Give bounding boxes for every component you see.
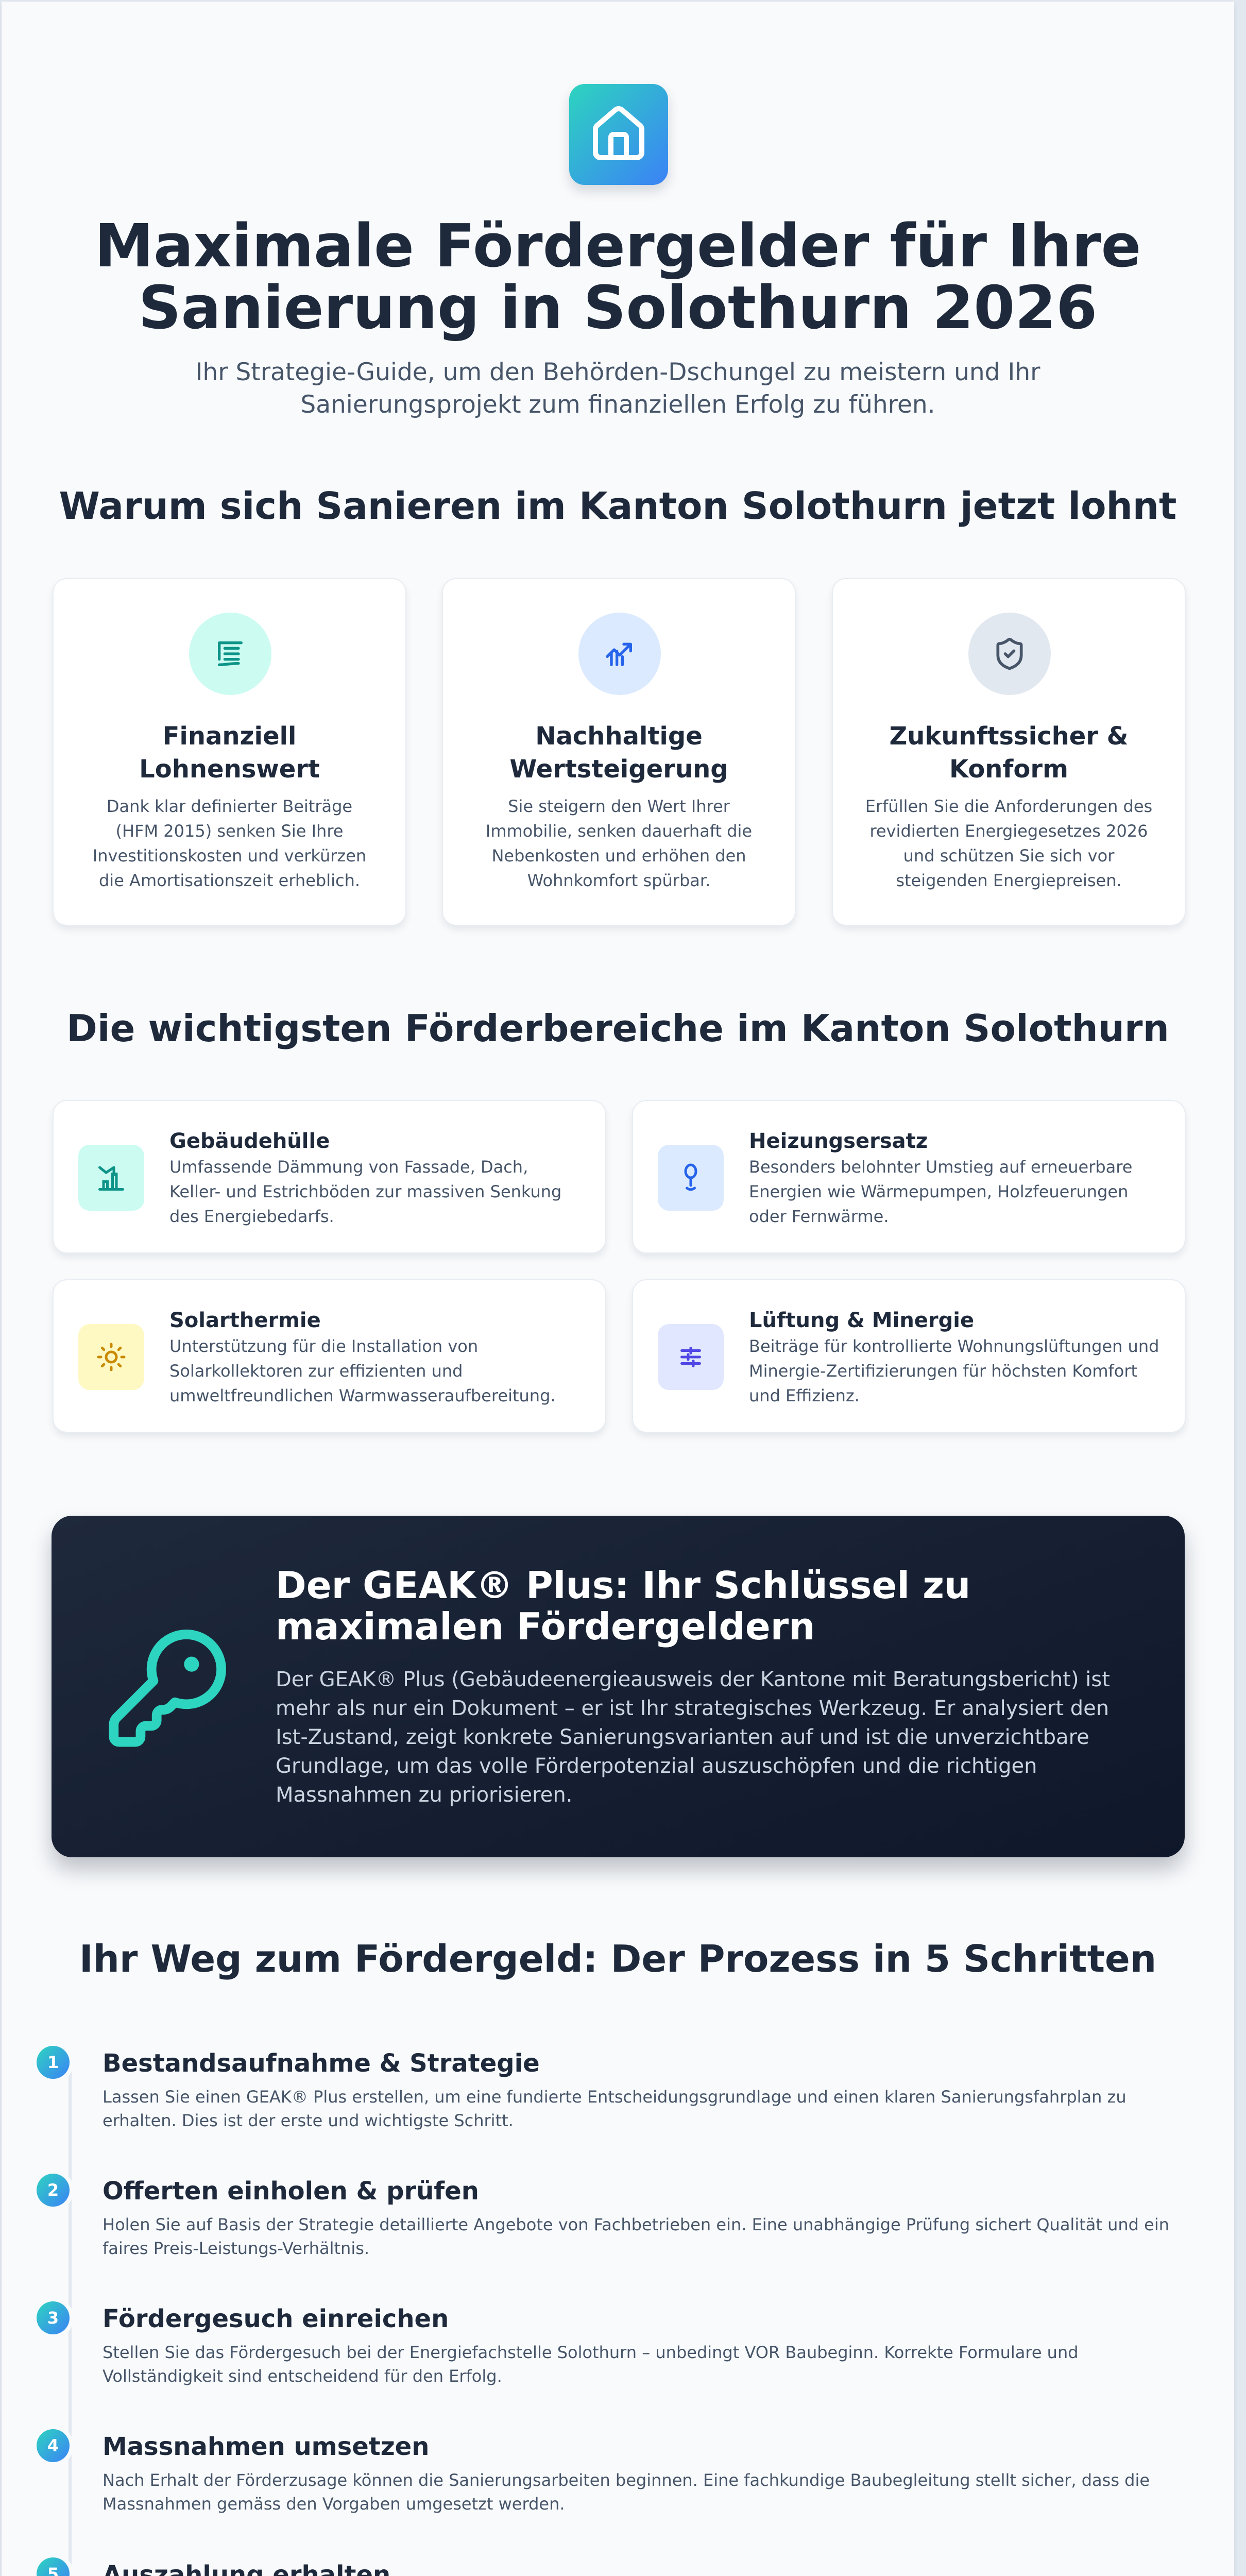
step 1: 1 <box>47 2053 59 2072</box>
panel: Finanziell Lohnenswert <box>53 578 406 926</box>
card text: revidierten Energiegesetzes 2026 <box>869 821 1148 841</box>
GEAK text: Massnahmen zu priorisieren. <box>276 1783 572 1807</box>
subtitle <box>196 358 1040 419</box>
GEAK text <box>276 1668 1110 1807</box>
feature title: Gebäudehülle <box>169 1129 330 1153</box>
card text: Sie steigern den Wert Ihrer <box>508 796 730 816</box>
card text: und schützen Sie sich vor <box>903 846 1114 866</box>
card text: (HFM 2015) senken Sie Ihre <box>116 821 343 841</box>
card text: Nebenkosten und erhöhen den <box>491 846 746 866</box>
feature text: Minergie-Zertifizierungen für höchsten Komfort <box>749 1361 1137 1381</box>
step 2: 2 <box>47 2180 59 2200</box>
panel: Nachhaltige Wertsteigerung <box>442 578 796 926</box>
step 4 <box>37 2429 1150 2514</box>
card text <box>865 796 1152 890</box>
timeline line <box>69 2062 72 2576</box>
step 3: Stellen Sie das Fördergesuch bei der Energiefachstelle Solothurn – unbedingt VOR Baubeginn. Korrekte Formulare und <box>103 2343 1079 2362</box>
panel: Solarthermie <box>53 1279 606 1433</box>
heading: Prozess: Ihr Weg zum Fördergeld: Der Prozess in 5 Schritten <box>79 1937 1156 1980</box>
card title: Finanziell <box>163 722 296 751</box>
step 5 <box>37 2557 390 2576</box>
step 1 <box>37 2046 1126 2130</box>
step 3: Vollständigkeit sind entscheidend für den Erfolg. <box>103 2366 502 2386</box>
step 4: Massnahmen gemäss den Vorgaben umgesetzt werden. <box>103 2494 565 2514</box>
title: Maximale Fördergelder für Ihre <box>95 212 1141 281</box>
feature text <box>749 1157 1132 1226</box>
feature text: umweltfreundlichen Warmwasseraufbereitung. <box>169 1386 556 1405</box>
GEAK text: Der GEAK® Plus (Gebäudeenergieausweis der Kantone mit Beratungsbericht) ist <box>276 1668 1110 1691</box>
step 2: Offerten einholen & prüfen <box>103 2177 479 2206</box>
heading: Warum: Warum sich Sanieren im Kanton Solothurn jetzt lohnt <box>59 484 1176 528</box>
card text <box>486 796 752 890</box>
card title <box>889 722 1129 784</box>
step 1: Lassen Sie einen GEAK® Plus erstellen, um eine fundierte Entscheidungsgrundlage und einen klaren Sanierungsfahrplan zu <box>103 2087 1126 2107</box>
feature text <box>169 1157 561 1226</box>
icon: finance <box>189 613 271 695</box>
panel: Heizungsersatz <box>632 1100 1186 1253</box>
step 3: Fördergesuch einreichen <box>103 2304 449 2333</box>
icon: shield <box>968 613 1051 695</box>
card text: die Amortisationszeit erheblich. <box>99 871 360 890</box>
feature text: Solarkollektoren zur effizienten und <box>169 1361 463 1381</box>
card title: Zukunftssicher & <box>889 722 1129 751</box>
feature text: oder Fernwärme. <box>749 1207 889 1226</box>
panel: GEAK Plus <box>52 1516 1185 1857</box>
icon: sliders <box>658 1324 724 1390</box>
step 4: 4 <box>47 2436 59 2455</box>
card text: Wohnkomfort spürbar. <box>527 871 710 890</box>
GEAK title <box>276 1564 970 1648</box>
icon: house <box>569 84 668 185</box>
step 1: erhalten. Dies ist der erste und wichtigste Schritt. <box>103 2111 514 2130</box>
step 2 <box>37 2174 1169 2258</box>
panel: Zukunftssicher <box>832 578 1186 926</box>
card title <box>139 722 320 784</box>
panel: Gebäudehülle <box>53 1100 606 1253</box>
step 4: Massnahmen umsetzen <box>103 2432 429 2461</box>
card title: Wertsteigerung <box>509 755 728 784</box>
step 1: Bestandsaufnahme & Strategie <box>103 2049 540 2078</box>
card text: Investitionskosten und verkürzen <box>93 846 366 866</box>
card title: Nachhaltige <box>535 722 703 751</box>
subtitle: Sanierungsprojekt zum finanziellen Erfolg zu führen. <box>300 391 935 419</box>
GEAK text: mehr als nur ein Dokument – er ist Ihr strategisches Werkzeug. Er analysiert den <box>276 1697 1109 1720</box>
card title: Lohnenswert <box>139 755 320 784</box>
GEAK text: Ist-Zustand, zeigt konkrete Sanierungsvarianten auf und ist die unverzichtbare <box>276 1725 1089 1749</box>
step 4: Nach Erhalt der Förderzusage können die Sanierungsarbeiten beginnen. Eine fachkundige Baubegleitung stellt sicher, dass die <box>103 2470 1150 2490</box>
step 3 <box>37 2301 1079 2386</box>
feature text: Besonders belohnter Umstieg auf erneuerbare <box>749 1157 1132 1177</box>
card text: Erfüllen Sie die Anforderungen des <box>865 796 1152 816</box>
card title <box>509 722 728 784</box>
icon: sun <box>78 1324 144 1390</box>
subtitle: Ihr Strategie-Guide, um den Behörden-Dschungel zu meistern und Ihr <box>196 358 1040 386</box>
icon: key <box>109 1630 226 1747</box>
step 3: 3 <box>47 2308 59 2328</box>
GEAK title: Der GEAK® Plus: Ihr Schlüssel zu <box>276 1564 970 1607</box>
heading: Förderbereiche: Die wichtigsten Förderbereiche im Kanton Solothurn <box>66 1007 1169 1050</box>
feature text <box>749 1336 1159 1405</box>
feature text: Unterstützung für die Installation von <box>169 1336 478 1356</box>
feature text: und Effizienz. <box>749 1386 860 1405</box>
card text: Dank klar definierter Beiträge <box>107 796 352 816</box>
GEAK text: Grundlage, um das volle Förderpotenzial auszuschöpfen und die richtigen <box>276 1754 1037 1778</box>
feature title: Lüftung & Minergie <box>749 1309 974 1332</box>
card text: Immobilie, senken dauerhaft die <box>486 821 752 841</box>
feature text: Energien wie Wärmepumpen, Holzfeuerungen <box>749 1182 1128 1201</box>
card title: Konform <box>949 755 1068 784</box>
step 2: Holen Sie auf Basis der Strategie detaillierte Angebote von Fachbetrieben ein. Eine unabhängige Prüfung sichert Qualität und ein <box>103 2215 1169 2234</box>
feature title: Heizungsersatz <box>749 1129 928 1153</box>
feature text <box>169 1336 556 1405</box>
title: Sanierung in Solothurn 2026 <box>139 274 1097 343</box>
title <box>95 212 1141 343</box>
card text: steigenden Energiepreisen. <box>896 871 1122 890</box>
feature text: des Energiebedarfs. <box>169 1207 334 1226</box>
icon: heat <box>658 1145 724 1211</box>
card text <box>93 796 366 890</box>
icon: building <box>78 1145 144 1211</box>
step 2: faires Preis-Leistungs-Verhältnis. <box>103 2239 369 2258</box>
feature text: Keller- und Estrichböden zur massiven Senkung <box>169 1182 561 1201</box>
panel: Lüftung <box>632 1279 1186 1433</box>
feature text: Umfassende Dämmung von Fassade, Dach, <box>169 1157 528 1177</box>
feature title: Solarthermie <box>169 1309 321 1332</box>
feature text: Beiträge für kontrollierte Wohnungslüftungen und <box>749 1336 1159 1356</box>
GEAK title: maximalen Fördergeldern <box>276 1605 815 1648</box>
icon: growth <box>578 613 661 695</box>
